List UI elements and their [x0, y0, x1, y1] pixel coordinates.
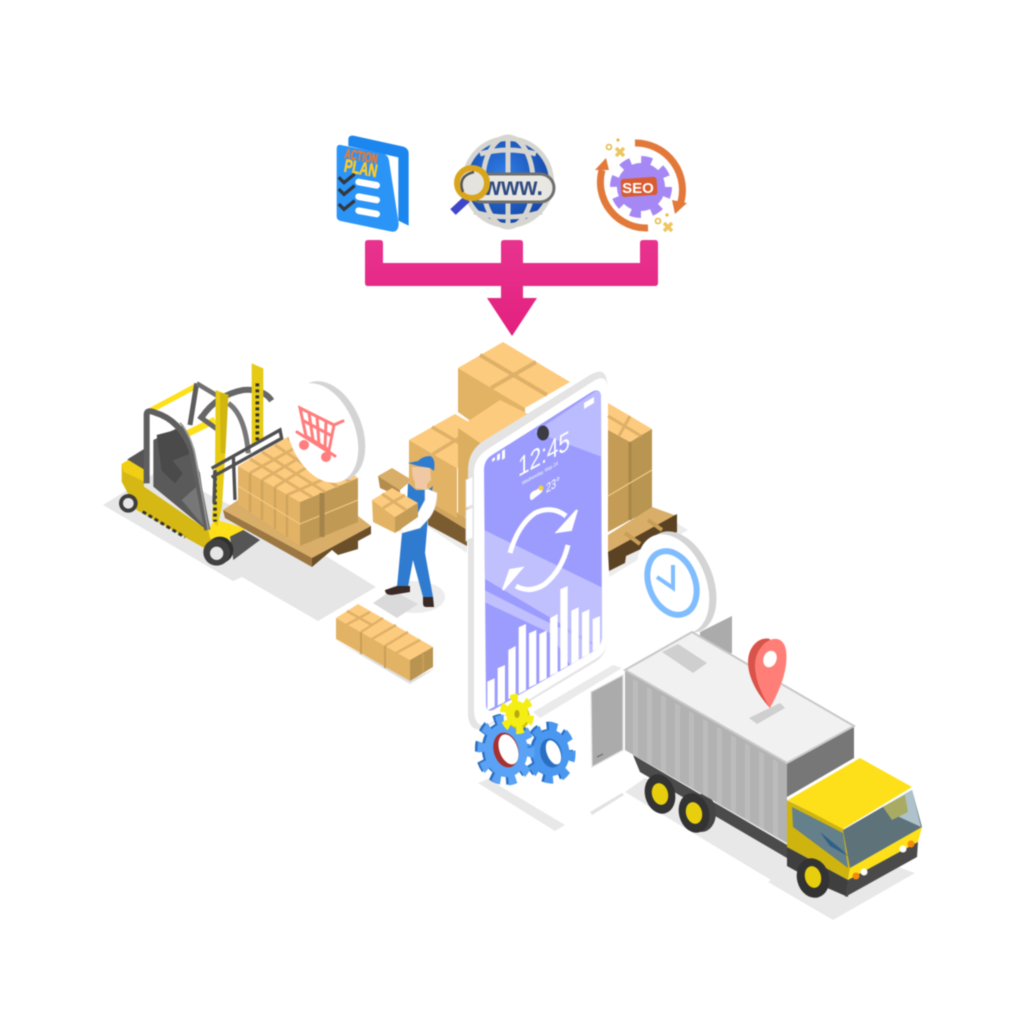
- wooden pallet under forklift boxes: [223, 500, 371, 567]
- weather: [530, 473, 560, 500]
- rear wheel: [119, 494, 138, 513]
- icon: action plan document: PLAN: [343, 156, 379, 181]
- icon: cart: [297, 408, 343, 460]
- smartphone: [466, 372, 607, 729]
- blue gear right: [526, 724, 574, 781]
- floor shadow: truck: [590, 778, 915, 920]
- overhead guard: [147, 383, 272, 530]
- phone body: [468, 372, 607, 729]
- bib: [406, 483, 433, 530]
- counterweight top: [127, 448, 145, 477]
- side buttons: [466, 476, 473, 541]
- left pallet: [378, 468, 470, 546]
- pile shadow: [428, 510, 688, 577]
- phone shadow: [533, 665, 622, 718]
- icon: SEO gear with arrows: SEO: [622, 180, 654, 197]
- cabin interior: [153, 425, 208, 532]
- front wheel: [792, 855, 834, 901]
- small box row on floor: [335, 604, 436, 684]
- right boxes: [608, 403, 652, 532]
- cardboard box stack on forks: [238, 432, 358, 546]
- top box: [458, 342, 570, 460]
- camera: [537, 426, 549, 440]
- boots: [385, 586, 434, 607]
- screen: [480, 380, 605, 720]
- badge: clock circle: [623, 520, 730, 645]
- speaker pill and signal: [492, 397, 594, 462]
- truck: [591, 616, 922, 901]
- big pallet with boxes: [378, 342, 677, 571]
- head: [412, 467, 431, 490]
- axle: [230, 530, 260, 560]
- right pallet: [608, 507, 677, 571]
- icon: clock: [638, 544, 706, 622]
- shirt arm: [402, 488, 437, 533]
- blue gear left: [476, 716, 533, 784]
- open door: [591, 675, 623, 767]
- carried box: [372, 488, 418, 533]
- gear shadow: [478, 779, 565, 831]
- icon: location pin: [748, 638, 786, 724]
- cab: [787, 758, 922, 897]
- worker: [372, 456, 445, 618]
- headlights: [852, 840, 914, 880]
- icon: www globe with magnifier: www.: [482, 173, 543, 201]
- worker shadow: [373, 581, 445, 618]
- screen bar chart: [487, 586, 600, 711]
- lower left boxes: [409, 400, 530, 520]
- mast: [212, 390, 228, 527]
- rear wheels: [640, 771, 716, 836]
- fork cage: [212, 430, 282, 503]
- floor shadow: forklift: [103, 470, 376, 621]
- hand: [394, 524, 402, 532]
- sync arrows: [503, 510, 577, 590]
- icon: action plan document: ACTION: [343, 145, 379, 167]
- yellow body: [122, 460, 212, 549]
- badge: shopping cart circle: [272, 370, 379, 494]
- icon: SEO gear with arrows: [595, 138, 687, 231]
- chassis: [633, 755, 787, 858]
- front wheel: [203, 537, 233, 566]
- trousers: [397, 518, 433, 597]
- yellow gear: [504, 698, 530, 730]
- weather: 23°: [546, 473, 560, 496]
- container: [625, 632, 854, 843]
- icon: action plan document: [337, 136, 409, 232]
- seat: [157, 428, 191, 483]
- arrow: merging pink arrow: [365, 240, 658, 336]
- forklift: [119, 363, 282, 566]
- far door: [700, 616, 732, 660]
- icon: www globe with magnifier: [453, 136, 554, 228]
- gears: [476, 698, 574, 784]
- clock time: 12:45: [518, 425, 570, 483]
- date: Wednesday, May 24: [522, 460, 558, 487]
- cap: [408, 456, 434, 471]
